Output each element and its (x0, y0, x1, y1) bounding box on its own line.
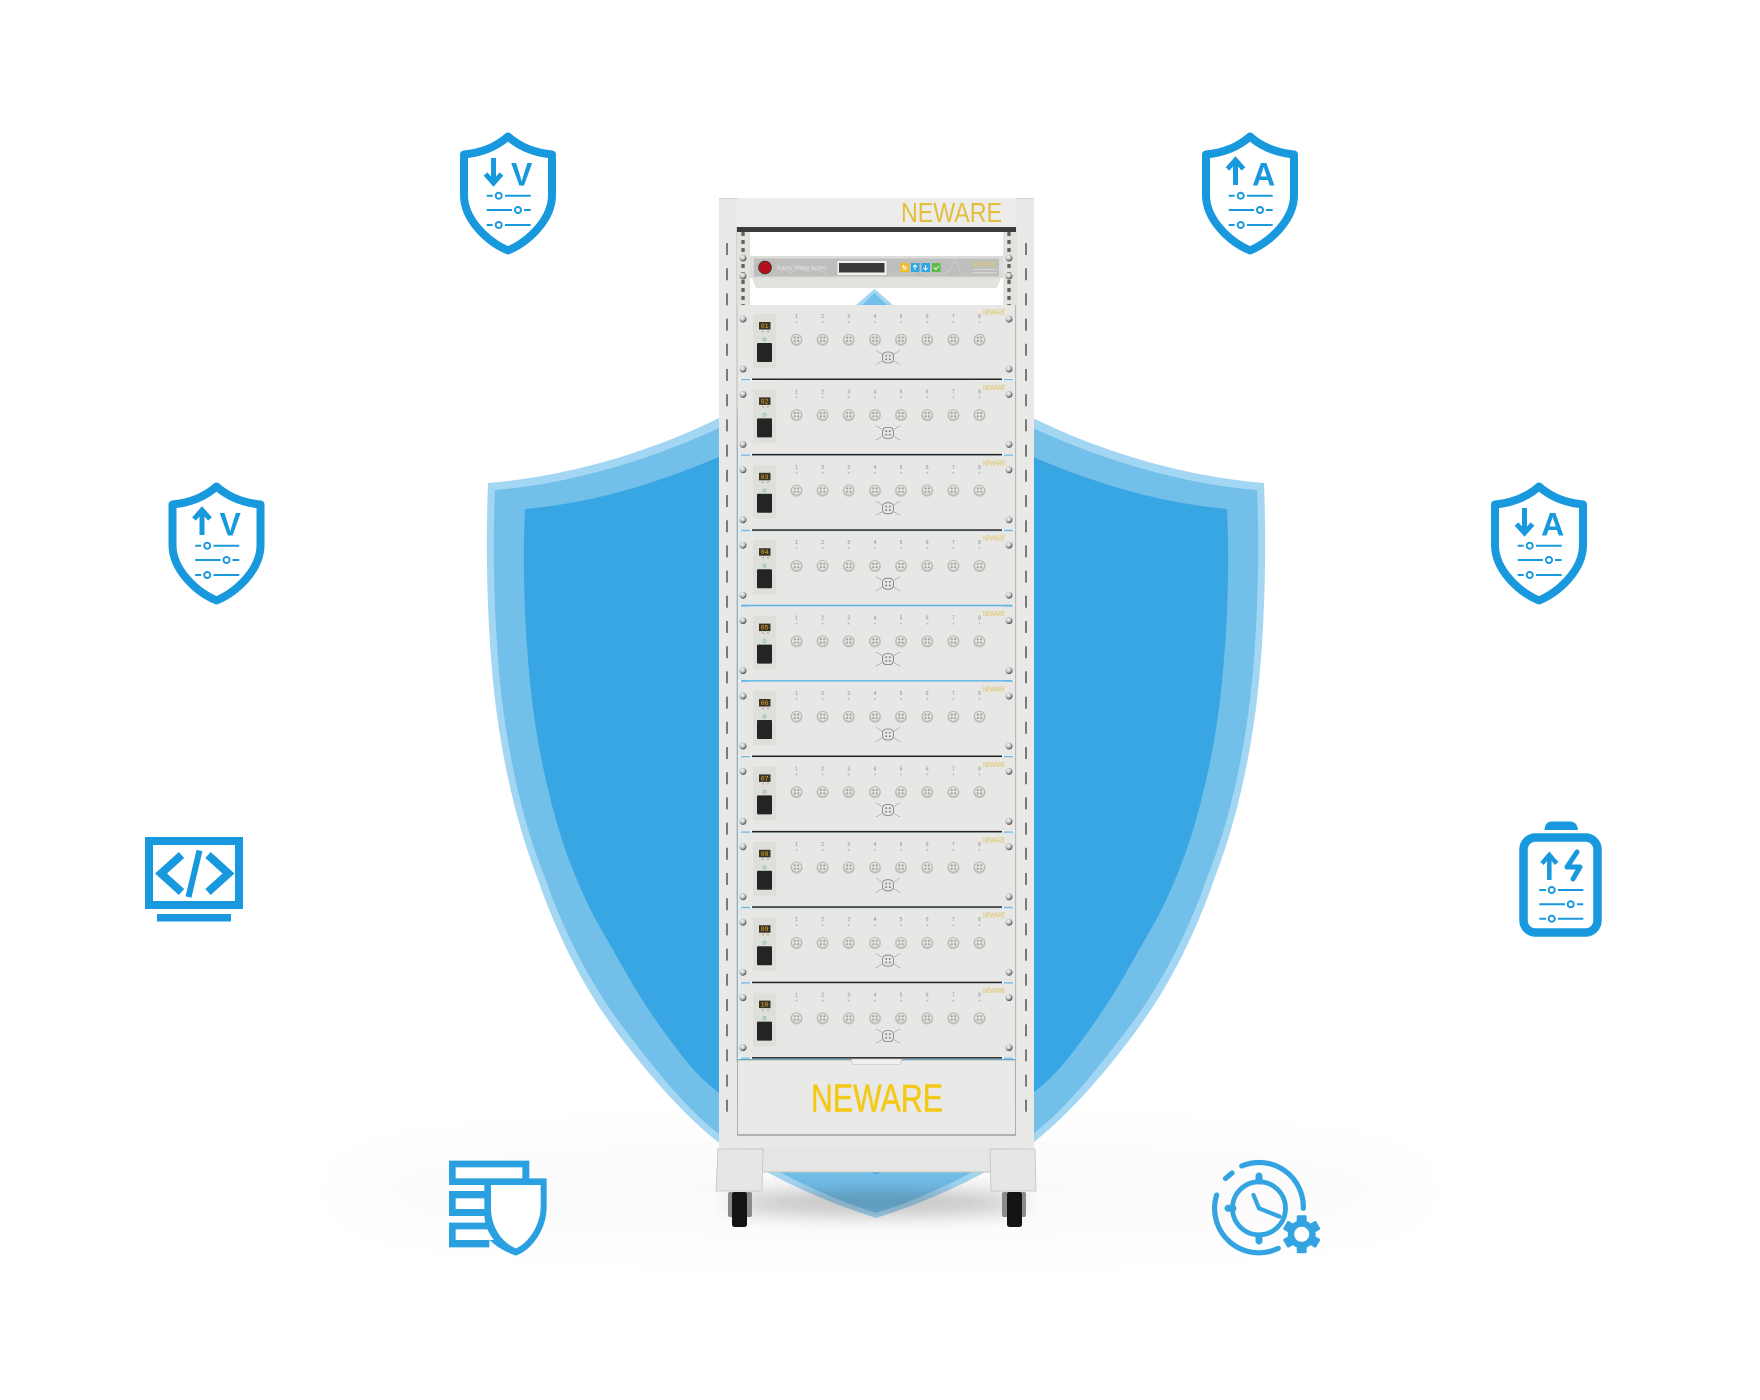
icon: clock with gear (1215, 1162, 1321, 1253)
module 06 (738, 682, 1015, 757)
module 01: 12345678 (795, 314, 981, 320)
module 07: NEWARE (983, 760, 1005, 769)
control panel: Battery Testing System (777, 266, 827, 272)
shield right half (876, 289, 1265, 1218)
module 02: NEWARE (983, 383, 1005, 392)
icon: shield up A (1206, 136, 1294, 250)
module 09: NEWARE (983, 911, 1005, 920)
module 06: NEWARE (983, 684, 1005, 694)
icon: battery with sliders (1524, 822, 1598, 932)
icon: shield up A: A (1252, 156, 1275, 192)
icon: shield down V: V (511, 156, 533, 192)
module 08: NEWARE (983, 835, 1005, 844)
module 02 (738, 380, 1015, 456)
module 07: 07 (761, 775, 769, 782)
module 03 (738, 456, 1015, 531)
right caster (1002, 1192, 1026, 1227)
floor shadow (320, 1140, 1440, 1240)
module 09: 09 (761, 926, 769, 933)
module 06: 12345678 (795, 691, 981, 697)
shield left half (487, 289, 876, 1218)
top logo: NEWARE (901, 197, 1002, 228)
module 05: 12345678 (795, 616, 981, 622)
module 08: 08 (761, 851, 769, 858)
module 07: 12345678 (795, 766, 981, 772)
shield apex above rack modules (856, 289, 893, 305)
module 08 (738, 833, 1015, 908)
rack base (716, 1136, 1036, 1191)
icon: document stack with shield (449, 1161, 547, 1256)
module 01: 01 (761, 323, 769, 330)
control panel (740, 254, 1012, 288)
rack ground shadow (726, 1192, 1026, 1214)
server rack (716, 197, 1036, 1227)
icon: code monitor (149, 841, 239, 922)
icon: shield down A: A (1541, 506, 1564, 542)
module 05 (738, 607, 1015, 682)
module 04: 12345678 (795, 540, 981, 546)
icon: shield down V (464, 136, 552, 250)
rack frame (719, 198, 1034, 1148)
module 10: 12345678 (795, 993, 981, 999)
module 05: 05 (761, 625, 769, 632)
module 02: 02 (761, 398, 769, 405)
module 03: 03 (761, 474, 769, 481)
module 07 (738, 757, 1015, 833)
module 08: 12345678 (795, 842, 981, 848)
module 10: 10 (761, 1002, 769, 1009)
module 05: NEWARE (983, 609, 1005, 618)
module 04: NEWARE (983, 534, 1005, 543)
left caster (728, 1192, 752, 1227)
module 10 (738, 984, 1015, 1059)
module 04: 04 (761, 549, 769, 556)
bottom logo: NEWARE (811, 1078, 943, 1120)
icon: shield down A (1495, 486, 1583, 600)
module 01 (738, 305, 1015, 380)
module 01: NEWARE (983, 308, 1005, 316)
module 03: NEWARE (983, 458, 1005, 467)
icon: shield up V: V (220, 506, 242, 542)
module 04 (738, 531, 1015, 607)
module 02: 12345678 (795, 389, 981, 395)
icon: shield up V (172, 486, 260, 600)
module 09: 12345678 (795, 917, 981, 923)
bottom drawer (738, 1059, 1016, 1136)
module 09 (738, 908, 1015, 984)
module 06: 06 (761, 700, 769, 707)
module 10: NEWARE (983, 986, 1005, 995)
control panel: NEWARE (972, 262, 997, 268)
module 03: 12345678 (795, 465, 981, 471)
large background shield (487, 289, 1265, 1218)
